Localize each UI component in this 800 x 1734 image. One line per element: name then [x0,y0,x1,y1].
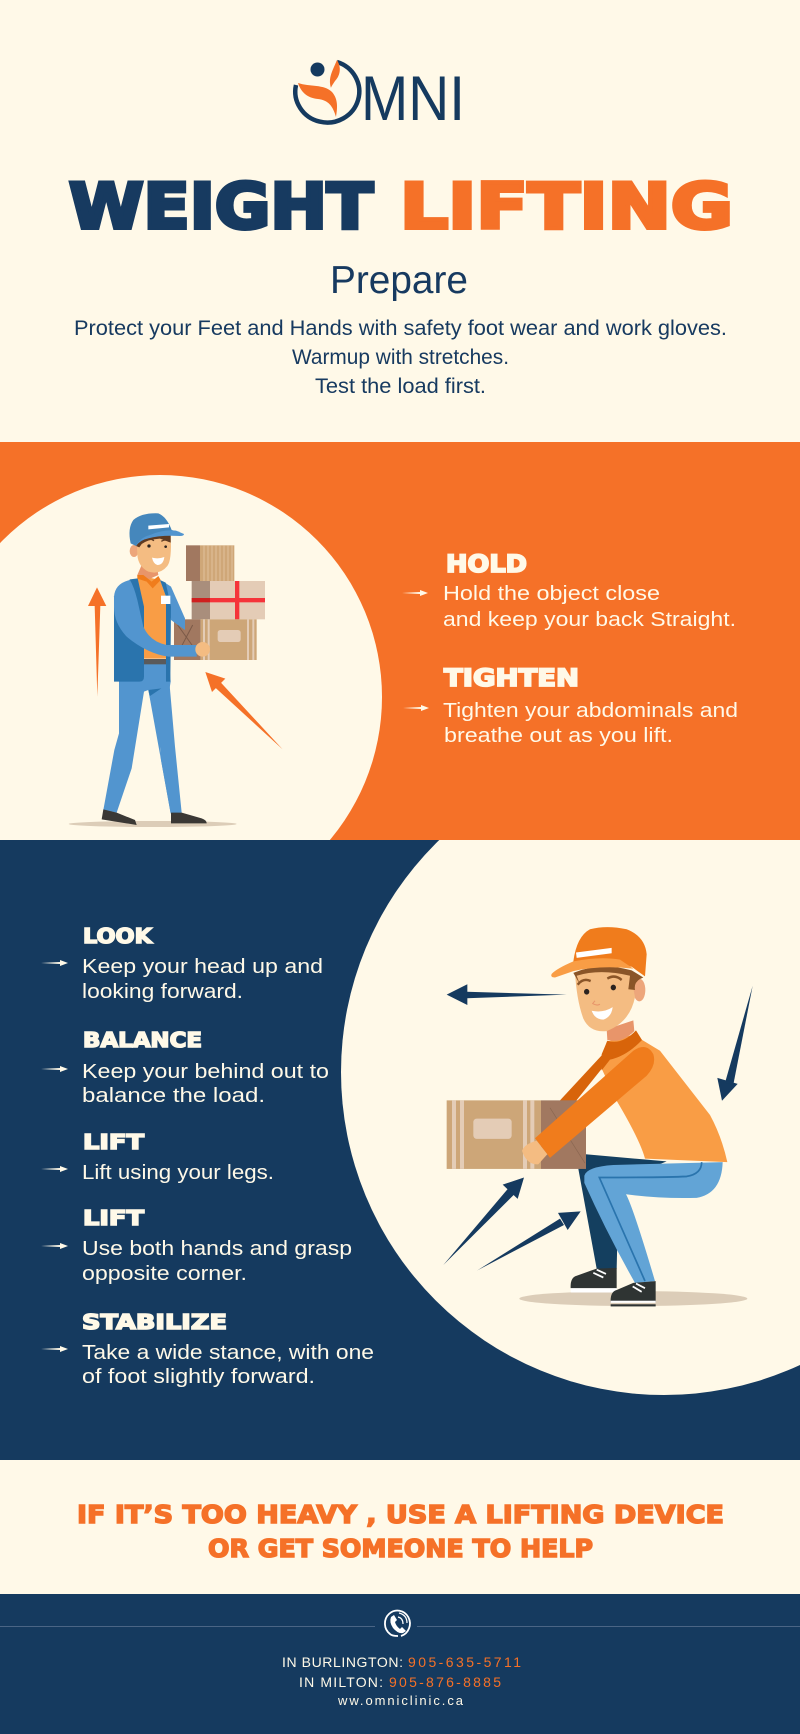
logo: Omni: MNI [361,64,465,134]
text: stabilize [82,1342,374,1388]
arrow [403,705,429,711]
text: balance [82,1061,329,1107]
arrow [41,1243,68,1249]
illustration: man lifting box [443,927,753,1306]
text: stabilize: Take a wide stance, with one [82,1342,374,1364]
text: both hands: Use both hands and grasp [82,1238,352,1260]
heading: balance: BALANCE [83,1028,202,1052]
lift step: hands [41,1206,352,1285]
callout: too heavy warning [77,1500,724,1563]
callout: too heavy warning: OR GET SOMEONE TO HELP [208,1534,593,1563]
text: tighten [443,700,738,747]
text: hold: Hold the object close [443,583,660,605]
stabilize step [41,1310,374,1388]
text: balance: Keep your behind out to [82,1061,329,1083]
lift step: legs [41,1130,274,1184]
phone number: Burlington: 905-635-5711 [408,1654,521,1670]
balance step [41,1028,329,1107]
text: both hands [82,1238,352,1285]
heading: look: LOOK [83,924,154,948]
text: both hands: opposite corner. [82,1263,247,1285]
heading: stabilize: STABILIZE [82,1310,227,1334]
title: Weight Lifting: WEIGHT [69,170,373,243]
illustration: man carrying boxes [69,513,283,827]
panel: hold and tighten [0,442,800,840]
tighten step [403,664,738,747]
contact: Milton: IN MILTON: [299,1674,383,1690]
text block: preparation steps: Test the load first. [315,375,486,398]
arrow [41,1066,68,1072]
text block: preparation steps: Warmup with stretches. [292,346,509,369]
heading: tighten: TIGHTEN [444,664,579,692]
website: ww.omniclinic.ca [337,1693,464,1708]
contact: Burlington: IN BURLINGTON: [282,1654,403,1670]
text: stabilize: of foot slightly forward. [82,1366,315,1388]
text block: preparation steps: Protect your Feet and Hands with safety foot wear and work gloves. [74,317,727,340]
text: look: Keep your head up and [82,956,323,978]
text: hold: and keep your back Straight. [443,609,736,631]
arrow [41,1166,68,1172]
text: lift using legs: Lift using your legs. [82,1162,274,1184]
text: balance: balance the load. [82,1085,265,1107]
arrow [402,590,428,596]
text: tighten: Tighten your abdominals and [443,700,738,722]
arrow [41,960,68,966]
title: Weight Lifting: LIFTING [400,170,733,243]
panel: look, balance, lift, stabilize [0,840,800,1460]
text block: preparation steps [74,317,727,398]
text: tighten: breathe out as you lift. [444,725,673,747]
text: look [82,956,323,1003]
look step [41,924,323,1003]
icon: phone [385,1611,410,1636]
subheading: Prepare: Prepare [330,259,468,302]
hold step [402,550,736,631]
callout: too heavy warning: IF IT’S TOO HEAVY , USE A LIFTING DEVICE [77,1500,724,1529]
heading: lift: LIFT [83,1206,144,1230]
logo: Omni [295,60,465,134]
arrow [41,1346,68,1352]
text: look: looking forward. [82,981,243,1003]
phone number: Milton: 905-876-8885 [389,1674,501,1690]
heading: hold: HOLD [446,550,527,578]
panel: footer contact [0,1594,800,1734]
heading: lift: LIFT [83,1130,144,1154]
title: Weight Lifting [69,170,733,243]
text: hold [443,583,736,631]
